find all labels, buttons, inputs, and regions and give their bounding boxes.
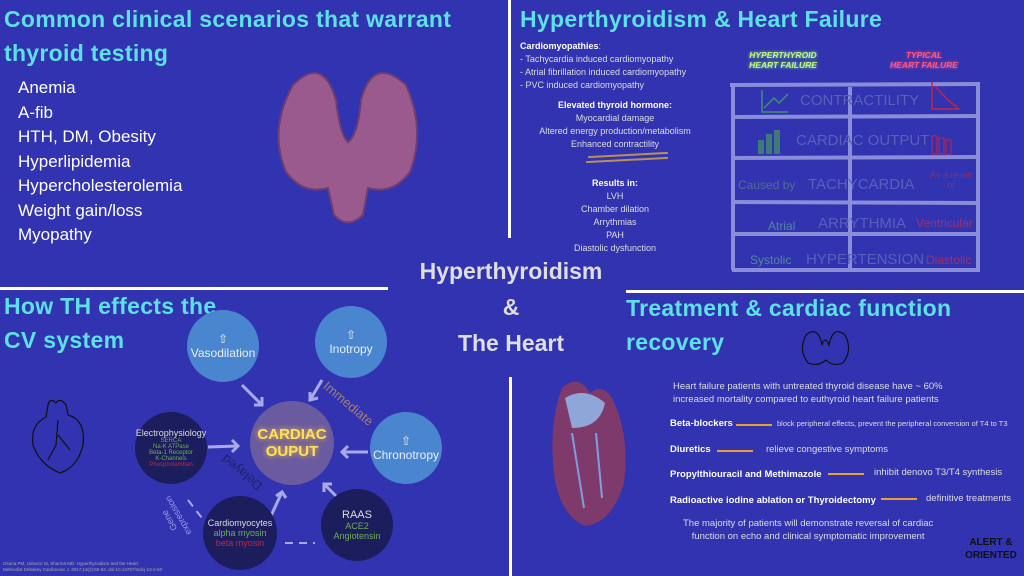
table: comparison: Ventricular — [916, 216, 973, 230]
text: results in: Results in: — [592, 178, 638, 188]
circle: cardiomyocytes — [203, 496, 277, 570]
treatment list: Propylthiouracil and Methimazole — [670, 469, 822, 480]
table: comparison: HYPERTENSION — [806, 251, 924, 268]
circle: inotropy: ⇧ — [346, 328, 356, 342]
text: mortality: increased mortality compared to euthyroid heart failure patients — [673, 394, 939, 405]
circle: vasodilation — [187, 310, 259, 382]
diagram: cardiac output — [135, 306, 442, 570]
circle: chronotropy: Chronotropy — [373, 448, 439, 462]
circle: cardiac output: CARDIAC — [257, 426, 327, 443]
label: typical heart failure: TYPICAL — [906, 50, 942, 60]
citation: Methodist Debakey Cardiovasc J. 2017;13(2):60-63. doi:10.14797/mdcj-13-2-60 — [3, 567, 162, 572]
circle: chronotropy — [370, 412, 442, 484]
table: comparison: CARDIAC OUTPUT — [796, 132, 929, 149]
circle: vasodilation: Vasodilation — [191, 346, 255, 360]
circle: electrophysiology: Electrophysiology — [136, 428, 206, 438]
circle: vasodilation: ⇧ — [218, 332, 228, 346]
table: comparison — [730, 82, 980, 272]
circle: cardiomyocytes: beta myosin — [216, 538, 264, 548]
center title — [420, 258, 602, 356]
text: elevated thyroid hormone: Altered energy production/metabolism — [539, 126, 691, 136]
text: elevated thyroid hormone — [539, 100, 691, 149]
text: elevated thyroid hormone: Enhanced contractility — [571, 139, 659, 149]
label: hyperthyroid heart failure — [747, 50, 818, 70]
logo: alert & oriented: ALERT & — [969, 537, 1013, 548]
circle: electrophysiology — [135, 412, 207, 484]
icon: anatomical heart — [552, 382, 626, 526]
text: reversal: The majority of patients will demonstrate reversal of cardiac — [683, 518, 933, 529]
treatment list: definitive treatments — [926, 493, 1011, 504]
text: elevated thyroid hormone: Myocardial damage — [576, 113, 654, 123]
center title: Hyperthyroidism — [420, 258, 602, 284]
text: results in: LVH — [607, 191, 623, 201]
table: comparison: TACHYCARDIA — [808, 176, 914, 193]
label: typical heart failure — [888, 50, 960, 70]
list: scenarios: A-fib — [18, 102, 53, 122]
heading: hyperthyroidism & heart failure: Hyperthyroidism & Heart Failure — [520, 6, 882, 32]
circle: electrophysiology: Beta-1 Receptor — [149, 450, 193, 456]
circle: cardiac output: OUPUT — [266, 443, 318, 460]
table: comparison: CONTRACTILITY — [800, 92, 919, 109]
citation — [3, 561, 162, 572]
center title: The Heart — [458, 330, 564, 356]
circle: inotropy: Inotropy — [329, 342, 373, 356]
treatment list — [670, 418, 1011, 506]
citation: Osuna PM, Udovcic M, Sharma MD. Hyperthyroidism and the Heart. — [3, 561, 139, 566]
text: cardiomyopathies: Cardiomyopathies: — [520, 41, 601, 51]
text: cardiomyopathies — [520, 41, 686, 90]
text: cardiomyopathies: - PVC induced cardiomyopathy — [520, 80, 644, 90]
text: cardiomyopathies: - Tachycardia induced cardiomyopathy — [520, 54, 673, 64]
circle: RAAS — [321, 489, 393, 561]
icon: thyroid outline — [802, 331, 850, 365]
list: scenarios: Myopathy — [18, 225, 92, 244]
circle: cardiomyocytes: Cardiomyocytes — [208, 518, 272, 528]
text: mortality: Heart failure patients with untreated thyroid disease have ~ 60% — [673, 381, 943, 392]
label: typical heart failure: HEART FAILURE — [890, 60, 958, 70]
text: results in: PAH — [606, 230, 624, 240]
table: comparison: Systolic — [750, 253, 791, 267]
list: scenarios: Weight gain/loss — [18, 200, 142, 220]
logo: alert & oriented: ORIENTED — [965, 550, 1017, 561]
list: scenarios: Hypercholesterolemia — [18, 176, 182, 195]
text: reversal — [683, 518, 933, 542]
center title: & — [503, 294, 519, 320]
text: results in: Diastolic dysfunction — [574, 243, 656, 253]
circle: RAAS: Angiotensin — [333, 531, 381, 541]
text: results in — [574, 178, 656, 253]
dividers — [508, 0, 511, 238]
treatment list: Radioactive iodine ablation or Thyroidectomy — [670, 495, 876, 506]
label: hyperthyroid heart failure: HEART FAILURE — [749, 60, 817, 70]
circle: cardiomyocytes: alpha myosin — [213, 528, 267, 538]
treatment list: inhibit denovo T3/T4 synthesis — [874, 467, 1002, 478]
list: scenarios: HTH, DM, Obesity — [18, 127, 156, 146]
circle: chronotropy: ⇧ — [401, 434, 411, 448]
icon: thyroid gland — [278, 72, 418, 224]
text: results in: Chamber dilation — [581, 204, 649, 214]
logo: alert & oriented — [965, 537, 1017, 561]
list: scenarios: Anemia — [18, 78, 76, 97]
label: gene expression: expression — [163, 494, 193, 537]
label: delayed: Delayed — [219, 451, 265, 494]
treatment list: relieve congestive symptoms — [766, 444, 888, 455]
circle: RAAS: RAAS — [342, 509, 372, 521]
table: comparison: As a result of — [930, 170, 972, 190]
circle: electrophysiology: SERCA — [161, 438, 181, 444]
circle: cardiac output — [250, 401, 334, 485]
text: results in: Arrythmias — [593, 217, 636, 227]
text: cardiomyopathies: - Atrial fibrillation induced cardiomyopathy — [520, 67, 686, 77]
table: comparison: ARRYTHMIA — [818, 215, 906, 232]
circle: electrophysiology: Phospholamban — [149, 462, 193, 468]
circle: inotropy — [315, 306, 387, 378]
text: mortality — [673, 381, 943, 405]
label: gene expression: Gene — [160, 508, 179, 533]
label: immediate: Immediate — [320, 378, 376, 429]
circle: electrophysiology: K-Channels — [155, 456, 187, 462]
table: comparison: Atrial — [768, 219, 795, 233]
heading: how TH effects: How TH effects the CV system — [4, 293, 216, 353]
heading: treatment: Treatment & cardiac function recovery — [626, 295, 951, 355]
circle: electrophysiology: Na-K ATPase — [153, 444, 189, 450]
treatment list: Diuretics — [670, 444, 711, 455]
table: comparison: Caused by — [738, 178, 795, 192]
text: elevated thyroid hormone: Elevated thyroid hormone: — [558, 100, 672, 110]
list: scenarios: Hyperlipidemia — [18, 152, 130, 170]
list: scenarios — [18, 78, 182, 244]
text: reversal: function on echo and clinical symptomatic improvement — [692, 531, 925, 542]
treatment list: Beta-blockers — [670, 418, 733, 429]
treatment list: block peripheral effects, prevent the peripheral conversion of T4 to T3 — [777, 419, 1008, 428]
label: hyperthyroid heart failure: HYPERTHYROID — [749, 50, 817, 60]
heading: clinical scenarios: Common clinical scenarios that warrant thyroid testing — [4, 6, 451, 66]
table: comparison: Diastolic — [926, 253, 971, 267]
icon: heart outline — [32, 400, 84, 474]
circle: RAAS: ACE2 — [345, 521, 369, 531]
